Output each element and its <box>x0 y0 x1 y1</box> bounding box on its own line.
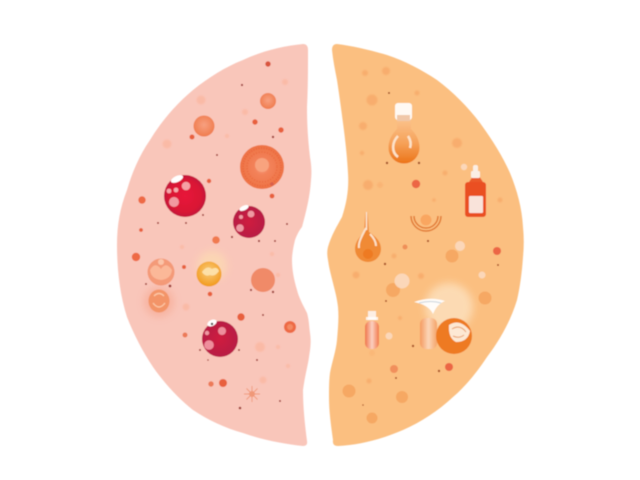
pale bubbles <box>386 164 486 340</box>
orange sphere with swirl <box>436 318 472 354</box>
panel: right orange half <box>327 44 524 446</box>
flask top <box>388 103 420 163</box>
red dropper bottle <box>465 165 486 217</box>
arc symbol <box>411 214 441 231</box>
large patterned orange cell <box>240 145 284 189</box>
patterned orange blobs <box>342 244 492 424</box>
faint pale blobs <box>162 79 290 384</box>
small flask <box>355 212 381 262</box>
dark dots below flask <box>386 92 420 164</box>
red ball middle <box>233 204 265 238</box>
red ball top <box>164 174 206 217</box>
tiny dark specks <box>145 84 288 409</box>
orange discs <box>194 93 296 333</box>
starburst <box>244 386 260 402</box>
red spots <box>412 180 501 371</box>
faint orange blobs <box>352 67 502 384</box>
tiny dark specks <box>362 240 499 406</box>
panel: left pink half <box>117 44 311 446</box>
pale orange cell top <box>148 258 174 286</box>
pale orange cell bottom <box>144 287 174 317</box>
golden ball <box>196 251 227 286</box>
spray bottle with pump <box>414 283 473 349</box>
red ball bottom <box>202 318 238 357</box>
small red and orange dots <box>132 61 284 387</box>
small tube bottle <box>365 311 379 349</box>
